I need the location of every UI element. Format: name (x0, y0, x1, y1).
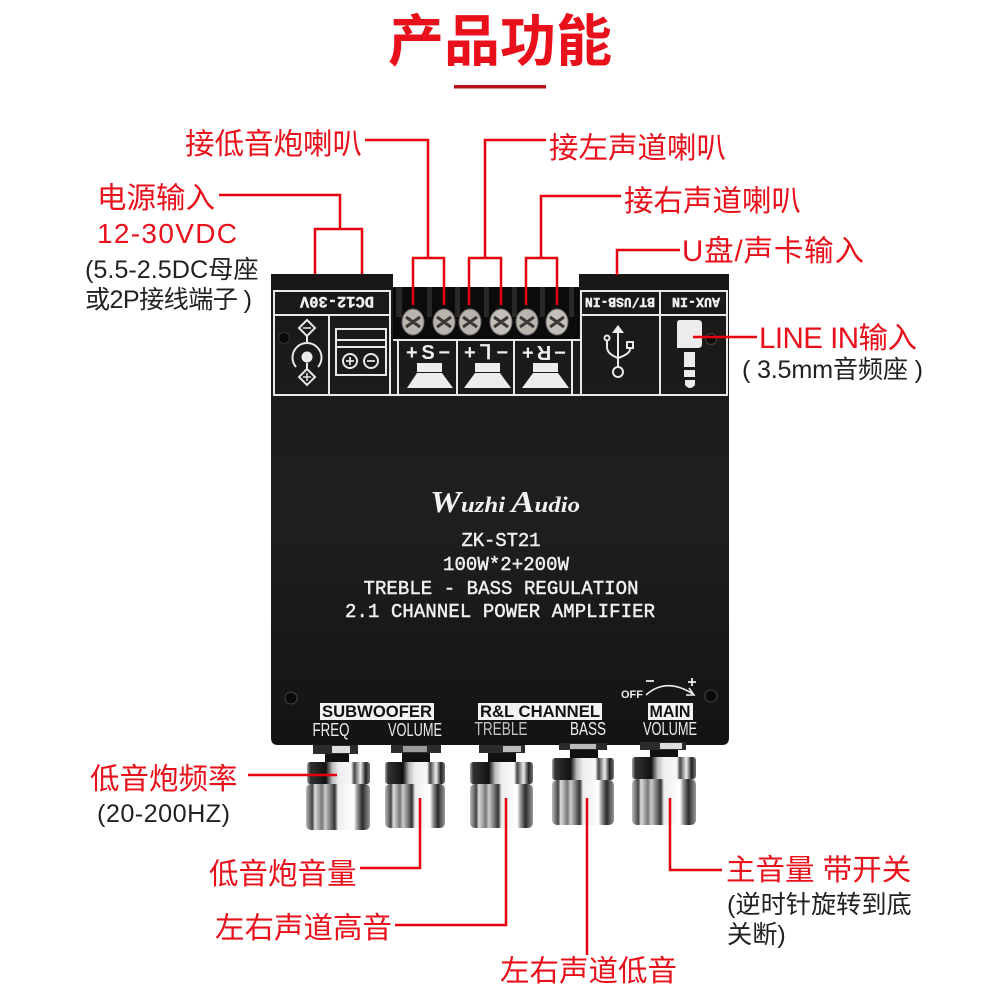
screws (278, 332, 717, 704)
note: power connector (85, 256, 259, 314)
amplifier board (271, 274, 729, 745)
board body (271, 274, 729, 745)
knob function labels: TREBLE (474, 719, 528, 739)
knob function labels: VOLUME (643, 719, 697, 739)
label: main volume (670, 798, 911, 887)
label: subwoofer speaker: 接低音炮喇叭 (185, 128, 362, 161)
label: main volume: 主音量 带开关 (726, 854, 911, 887)
subwoofer label: SUBWOOFER (322, 702, 432, 721)
label: power input: 12-30VDC (97, 218, 237, 249)
label: subwoofer volume: 低音炮音量 (209, 858, 357, 891)
label: left channel speaker (469, 132, 726, 305)
model and specification text (345, 530, 655, 623)
title underline (454, 85, 546, 88)
note: main volume switch: 关断) (727, 921, 786, 949)
label: subwoofer frequency: 低音炮频率 (90, 763, 238, 796)
label: subwoofer volume (209, 798, 420, 891)
knob function labels: FREQ (312, 720, 350, 740)
speaker channel S: +S− (406, 342, 450, 364)
label: right channel speaker (526, 185, 801, 305)
AUX label: AUX-IN (672, 293, 720, 309)
model and specification text: TREBLE - BASS REGULATION (364, 578, 638, 600)
note: main volume switch: (逆时针旋转到底 (727, 891, 912, 919)
DC label: DC12-30V (300, 292, 374, 310)
icon: USB (604, 325, 633, 377)
knob: subwoofer volume (385, 745, 445, 828)
label: line in: LINE IN输入 (759, 322, 917, 355)
note: audio socket: ( 3.5mm音频座 ) (742, 356, 923, 384)
knob function labels: BASS (570, 719, 606, 739)
label: USB and sound card input (617, 235, 864, 275)
model and specification text: 100W*2+200W (443, 554, 570, 576)
knob: subwoofer frequency (306, 745, 370, 830)
speaker channel S (406, 342, 453, 388)
icon: 2P connector (336, 329, 386, 375)
speaker channel R (522, 341, 569, 388)
label: power input (97, 182, 362, 274)
note: main volume switch (727, 891, 912, 949)
knobs (306, 742, 696, 830)
label: power input: 电源输入 (97, 182, 215, 215)
label: left channel speaker: 接左声道喇叭 (549, 132, 726, 165)
speaker channel L: +⅂− (464, 342, 508, 364)
terminal block (393, 287, 579, 340)
R&L channel label: R&L CHANNEL (480, 702, 600, 721)
silkscreen panel frame (274, 291, 727, 395)
knob: bass (552, 743, 614, 825)
volume direction marker (621, 678, 696, 701)
icon: DC jack (292, 320, 321, 385)
label: subwoofer speaker (185, 128, 444, 305)
volume direction marker: OFF (621, 689, 643, 701)
main label: MAIN (650, 702, 690, 721)
icon: audio jack (677, 320, 702, 388)
knob function labels (312, 719, 697, 740)
title: 产品功能 (388, 10, 612, 73)
BT/USB label: BT/USB-IN (585, 293, 655, 309)
speaker channel R: −R+ (522, 341, 566, 363)
speaker channel L (464, 342, 511, 388)
knob function labels: VOLUME (388, 720, 442, 740)
model and specification text: 2.1 CHANNEL POWER AMPLIFIER (345, 601, 655, 623)
label: USB and sound card input: U盘/声卡输入 (682, 235, 864, 268)
label: treble (215, 798, 506, 945)
label: treble: 左右声道高音 (215, 912, 392, 945)
brand logo: Wuzhi Audio (430, 484, 580, 519)
label: right channel speaker: 接右声道喇叭 (624, 185, 801, 218)
note: power connector: 或2P接线端子 ) (85, 286, 252, 314)
model and specification text: ZK-ST21 (462, 530, 540, 552)
label: bass: 左右声道低音 (500, 955, 677, 988)
knob: treble (470, 745, 533, 828)
knob: main volume (632, 742, 696, 825)
note: frequency range: (20-200HZ) (97, 800, 230, 828)
note: power connector: (5.5-2.5DC母座 (85, 256, 259, 284)
